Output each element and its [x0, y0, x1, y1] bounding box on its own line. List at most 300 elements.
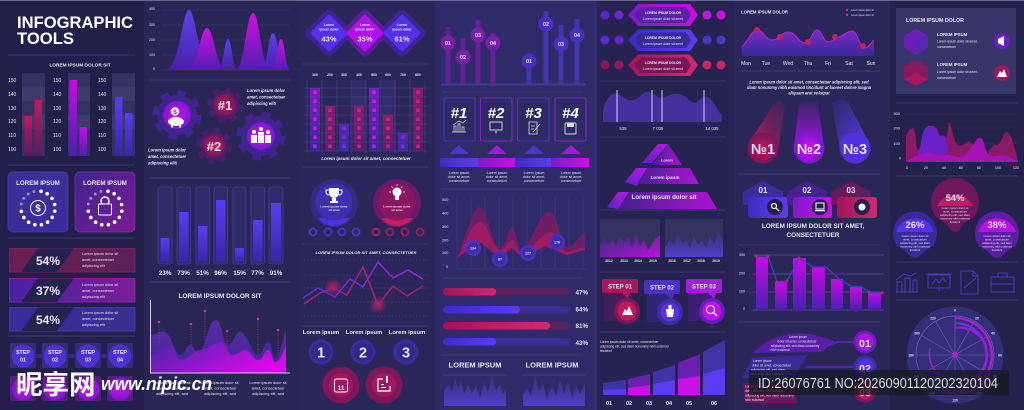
panel: arc list: adipiscing elit, sed diam nonummy: [745, 394, 794, 398]
panel: diamonds: ipsum dolor: [355, 28, 375, 32]
chart: week wave: Fri: [825, 61, 831, 67]
bars: [24, 80, 132, 156]
chart: radial: 120: [952, 398, 958, 402]
axis labels: 120: [8, 119, 17, 125]
chart: radial: 80: [993, 374, 997, 378]
panel: triangle strip: dolor sit amet,: [560, 175, 582, 179]
watermark: site name: 昵享网: [16, 363, 96, 402]
chart: peak area: 100: [149, 53, 155, 57]
chart: rising bars: tincidunt: [600, 349, 612, 353]
panel: arc list: adipiscing elit, sed diam: [751, 368, 785, 372]
chart: vertical progress bars: 96%: [214, 270, 227, 277]
chart: dual year spikes: 2017: [683, 259, 691, 263]
panel: ranked beams: [748, 100, 870, 164]
chart: week wave: Wed: [783, 61, 793, 67]
ribbon row 3: Lorem ipsum dolor sit amet: [643, 67, 683, 71]
chart: lollipops: 03: [475, 33, 481, 39]
chart: mountain bubbles: 134: [470, 246, 476, 250]
panel: step badges: [10, 343, 133, 401]
text block: description: diam nonummy nibh euismod tincidunt ut laoreet dolore magna: [747, 85, 872, 90]
heading: CONSECTETUER: [787, 232, 840, 239]
gear caption 2: adipiscing elit!: [148, 160, 178, 166]
gear caption 1: Lorem ipsum dolor: [247, 88, 285, 93]
row 54% red: [10, 248, 135, 272]
gear: #1: #1: [218, 98, 232, 113]
chart: rising bars: adipiscing elit, sed diam nonummy nibh euismod: [600, 344, 669, 348]
drop 54%: Lorem ipsum dolor sit: [942, 206, 969, 210]
row 54% blue: [10, 308, 135, 331]
panel: diamonds: 35%: [357, 34, 373, 44]
drop 26%: amet, consectetuer: [903, 238, 927, 242]
chart: vertical progress bars: 51%: [196, 270, 209, 277]
icon: landscape: [994, 65, 1010, 81]
panel: triangle strip: Lorem ipsum: [449, 171, 469, 175]
row 54% blue: amet, consectetuer: [82, 317, 115, 321]
beam №1: №1: [751, 142, 775, 158]
legend: [846, 9, 874, 17]
item 01: 01: [859, 338, 871, 350]
heading: LOREM IPSUM DOLOR SIT AMET,: [762, 223, 864, 230]
panel: dollar card: $: [35, 204, 41, 214]
chart: peak area: [149, 7, 291, 71]
panel: step badges: 03: [85, 358, 91, 364]
panel: lorem list with cubes: LOREM IPSUM: [937, 62, 968, 67]
chart: radial: 220: [930, 316, 936, 320]
gear: #2: #2: [207, 139, 221, 154]
card #1: [444, 98, 475, 141]
axis labels: 150: [53, 78, 62, 84]
watermark: site name: www.nipic.cn: [101, 374, 212, 394]
axis labels: 120: [53, 119, 62, 125]
panel: dollar card: LOREM IPSUM: [16, 180, 60, 187]
legend: Lorem ipsum dolor sit: [851, 14, 874, 17]
chart: radial: 0: [954, 308, 956, 312]
panel: two mini spike charts: LOREM IPSUM: [526, 360, 578, 370]
chart notes: adipiscing elit, sed: [204, 391, 236, 396]
item 02: 02: [859, 363, 871, 375]
chart: overlapping areas: [894, 112, 1019, 170]
panel: step badges: STEP: [16, 350, 30, 356]
icon: purple cube: [904, 29, 928, 55]
panel: triangle strip: dolor sit amet,: [486, 175, 508, 179]
chart: grid squares: 100: [312, 73, 318, 77]
chart: radial: 40: [991, 332, 995, 336]
ribbon row 1: LOREM IPSUM DOLOR: [645, 11, 682, 15]
card #4: #4: [562, 105, 579, 122]
drop 26%: adipiscing elit, sed diam: [900, 241, 931, 245]
chart: week wave: Sat: [845, 61, 853, 67]
panel: lock card: [75, 172, 135, 232]
chart: rising bars: 03: [646, 401, 652, 407]
panel: lorem list with cubes: consectetuer: [937, 76, 957, 80]
chart: rising bars: Lorem ipsum dolor sit amet, consectetuer: [600, 340, 659, 344]
chart: horizontal progress: 43%: [576, 340, 589, 347]
panel: lock card: LOREM IPSUM: [83, 180, 127, 187]
panel: triangle strip: dolor sit amet,: [523, 175, 545, 179]
panel: steps with icons: [602, 279, 725, 325]
drop 26%: tincidunt: [910, 248, 920, 252]
chart: overlapping areas: 0: [899, 156, 901, 160]
gear: people: [239, 114, 283, 158]
axis labels: 110: [53, 133, 61, 139]
panel: trophy circle: Lorem ipsum dolor: [320, 204, 348, 208]
panel: triple bar charts: [8, 62, 135, 156]
chart: overlapping areas: 100: [995, 166, 1001, 170]
panel: diamonds: Lorem: [360, 23, 370, 27]
row 37% magenta: Lorem ipsum dolor sit: [82, 283, 119, 287]
panel: triangle strip: Lorem ipsum: [561, 171, 581, 175]
drop 38%: 38%: [987, 220, 1007, 231]
panel: arc list: nonummy nibh euismod: [750, 372, 784, 376]
chart: horizontal progress: 47%: [576, 290, 589, 296]
card #3: [518, 98, 549, 141]
step 02: STEP 02: [650, 286, 675, 292]
legend: Lorem ipsum dolor sit: [851, 9, 874, 12]
chart: peak area: 200: [149, 38, 155, 42]
drop 54%: amet, consectetuer: [943, 210, 967, 214]
ribbon row 2: LOREM IPSUM DOLOR: [645, 36, 682, 40]
panel: numbered list: 2: [359, 346, 367, 362]
chart: week wave: Mon: [741, 61, 751, 67]
chart notes: Lorem ipsum dolor sit: [153, 380, 192, 385]
panel: lorem list with cubes: Lorem ipsum dolor sit amet,: [937, 70, 978, 74]
panel: house icons: [743, 181, 877, 218]
chart: radial: 20: [975, 316, 979, 320]
chart: vertical progress bars: 91%: [270, 270, 283, 277]
chart: grid squares: 600: [385, 73, 391, 77]
row 54% red: Lorem ipsum dolor sit: [82, 252, 119, 256]
panel: dollar card: [8, 172, 68, 232]
row 54% blue: 54%: [36, 313, 60, 327]
axis labels: 100: [8, 147, 17, 153]
chart: wave with markers: [603, 90, 722, 131]
chart: overlapping areas: 120: [1013, 166, 1019, 170]
panel: lorem list with cubes: [896, 8, 1016, 94]
panel: numbered list: [303, 330, 425, 404]
card #4: [555, 98, 586, 141]
icon: red cube: [904, 60, 928, 86]
axis labels: 130: [8, 106, 17, 112]
chart: mountain bubbles: 300: [442, 225, 448, 229]
panel: numbered list: Lorem ipsum: [303, 330, 339, 336]
chart: overlapping areas: 300: [894, 112, 900, 116]
chart: lollipops: 02: [543, 22, 549, 28]
icon: presentation: [926, 274, 952, 291]
chart: grid squares: [304, 73, 428, 161]
panel: two mini spike charts: [443, 360, 586, 406]
axis labels: 100: [98, 147, 107, 153]
text block: description: Lorem ipsum dolor sit amet, consectetuer adipiscing elit, sed: [749, 80, 869, 84]
chart: grid squares: 400: [356, 73, 362, 77]
row 54% red: 54%: [36, 254, 60, 268]
panel: triangle strip: consectetuer: [449, 179, 470, 183]
row 37% magenta: 37%: [36, 284, 60, 298]
chart: week wave: Thu: [804, 61, 813, 67]
panel: lightbulb circle: Lorem ipsum dolor: [383, 204, 411, 208]
title: [17, 14, 133, 48]
chart: vertical progress bars: 73%: [177, 270, 190, 277]
chart: dual year spikes: 2019: [712, 259, 720, 263]
axis labels: [8, 78, 107, 153]
chart: overlapping areas: 60: [959, 166, 963, 170]
chart: radial: 60: [998, 354, 1002, 358]
axis labels: 150: [98, 78, 107, 84]
chart: horizontal progress: 81%: [576, 323, 589, 330]
drop 38%: nonummy nibh euismod: [982, 244, 1012, 248]
chart: lollipops: 03: [558, 42, 564, 48]
panel: triangle strip: [440, 145, 589, 183]
chart: crossing lines: [303, 250, 428, 316]
gear caption 2: Lorem ipsum dolor: [148, 148, 186, 152]
title: TOOLS: [17, 30, 74, 48]
panel: arc list: Lorem ipsum: [789, 335, 808, 339]
panel: lightbulb circle: [373, 179, 421, 227]
drop 26%: [893, 211, 937, 258]
chart: mountain bubbles: 400: [442, 212, 448, 216]
chart: lollipops: 01: [445, 41, 451, 47]
panel: lightbulb circle: sit amet: [391, 208, 403, 212]
gear caption 1: amet, consectetuer: [247, 94, 286, 100]
chart notes: Lorem ipsum dolor sit: [201, 380, 240, 385]
drop 26%: Lorem ipsum dolor sit: [902, 234, 929, 238]
chart: radial: 160: [913, 374, 919, 378]
chart: crossing lines: LOREM IPSUM DOLOR SIT AMET, CONSECTETUER: [316, 250, 417, 255]
ribbon row 2: Lorem ipsum dolor sit amet: [643, 42, 683, 46]
drop 54%: 54%: [945, 193, 965, 204]
ribbon row 2: [600, 30, 726, 51]
chart: rising bars: 04: [666, 401, 673, 407]
gear: piggy bank: $: [173, 109, 177, 116]
icon: document: [961, 271, 978, 294]
chart: rising bars: 06: [711, 401, 717, 407]
panel: step badges: 01: [20, 358, 26, 364]
panel: triangle strip: Lorem ipsum: [524, 171, 544, 175]
chart notes: amet, consectetuer: [251, 386, 285, 390]
axis labels: 130: [98, 106, 107, 112]
chart: radial: 200: [914, 332, 920, 336]
panel: arc list: [742, 330, 876, 403]
chart: peak area: 300: [149, 23, 155, 27]
row 54% red: adipiscing elit: [82, 264, 106, 268]
chart: week wave: [741, 9, 876, 67]
panel: triangle strip: consectetuer: [524, 179, 545, 183]
chart: week wave: LOREM IPSUM DOLOR: [741, 10, 789, 14]
chart: bars with line: [739, 253, 884, 311]
panel: diamonds: Lorem: [397, 23, 407, 27]
beam №2: №2: [797, 142, 821, 158]
chart: dual year spikes: 2012: [605, 259, 613, 263]
icon: briefcase: [991, 273, 1014, 292]
chart: lollipops: 04: [574, 33, 580, 39]
panel: pyramid: Lorem: [661, 158, 673, 162]
chart: lollipops: 01: [526, 59, 532, 65]
panel: diamonds: 43%: [321, 34, 337, 44]
chart: mountain bubbles: 0: [446, 265, 448, 269]
chart: bars with line: 100: [739, 290, 745, 294]
drop 26%: nonummy nibh euismod: [900, 244, 930, 248]
axis labels: 140: [53, 92, 62, 98]
chart: wave with markers: 535: [619, 126, 627, 131]
row 37% magenta: amet, consectetuer: [82, 289, 115, 293]
panel: percentage rows: [10, 248, 135, 331]
card #2: #2: [488, 105, 505, 122]
drop 38%: adipiscing elit, sed diam: [982, 241, 1013, 245]
chart: peak area: 400: [149, 7, 155, 11]
panel: arc list: nibh euismod: [745, 398, 764, 402]
row 37% magenta: [10, 278, 135, 302]
text block: description: aliquam erat volutpat: [788, 90, 830, 96]
panel: diamonds: ipsum dolor: [392, 28, 412, 32]
panel: pyramid: Lorem Ipsum dolor sit: [632, 194, 696, 201]
panel: outline icons: [896, 271, 1014, 294]
axis labels: 140: [98, 92, 107, 98]
panel: numbered list: Lorem ipsum: [389, 330, 425, 336]
watermark: id bar: ID:26076761 NO:20260901120202320104: [758, 376, 998, 392]
watermark: site name: [16, 363, 212, 402]
panel: diamonds: ipsum dolor: [319, 28, 339, 32]
step 01: STEP 01: [608, 284, 633, 290]
panel: triangle strip: dolor sit amet,: [448, 175, 470, 179]
chart: radial: [906, 306, 1004, 404]
chart backgrounds: [22, 73, 135, 156]
chart: week wave: Tue: [762, 61, 770, 67]
chart: vertical progress bars: 15%: [233, 270, 246, 277]
panel: diamonds: [304, 8, 427, 58]
chart: overlapping areas: 0: [906, 166, 908, 170]
chart: horizontal progress: 64%: [576, 306, 589, 314]
panel: step badges: 02: [52, 358, 58, 364]
panel: percentage drops: [893, 178, 1019, 258]
chart: vertical progress bars: 23%: [159, 270, 172, 277]
drop 26%: 26%: [905, 220, 925, 231]
chart: overlapping areas: 200: [894, 126, 900, 130]
panel: numbered list: Lorem ipsum: [346, 330, 382, 336]
chart: week wave: Sun: [867, 61, 876, 67]
chart: grid squares: 500: [371, 73, 377, 77]
panel: trophy circle: sit amet: [328, 208, 340, 212]
chart notes: Lorem ipsum dolor sit: [249, 380, 288, 385]
axis labels: 100: [53, 147, 62, 153]
card #1: #1: [451, 105, 467, 122]
row 37% magenta: adipiscing elit: [82, 295, 106, 299]
chart: wave with markers: 14 035: [705, 126, 719, 131]
icon: note: [366, 366, 402, 404]
panel: diamonds: Lorem: [324, 23, 334, 27]
row 54% red: amet, consectetuer: [82, 258, 115, 262]
chart: radial: 140: [929, 392, 935, 396]
ribbon row 1: [600, 4, 726, 26]
panel: pyramid: Lorem ipsum: [651, 175, 679, 180]
drop 54%: nonummy nibh euismod: [940, 216, 970, 220]
panel: numbered list: 1: [317, 346, 325, 362]
panel: step badges: STEP: [48, 350, 62, 356]
chart: dual year spikes: 2018: [697, 259, 705, 263]
chart: rising bars: 01: [606, 401, 612, 407]
panel: arc list: adipiscing elit, sed diam nonummy: [771, 344, 820, 348]
chart: layered area with pins: [150, 293, 290, 396]
chart: mountain bubbles: 200: [442, 238, 448, 242]
chart: rising bars: [600, 340, 725, 407]
house 03: 03: [847, 186, 856, 195]
chart: dual year spikes: 2013: [620, 259, 628, 263]
ribbon row 3: LOREM IPSUM DOLOR: [645, 61, 682, 65]
chart: radial: 180: [908, 354, 914, 358]
axis labels: 130: [53, 106, 62, 112]
chart: mountain bubbles: 176: [554, 240, 560, 244]
panel: numbered list: 3: [402, 346, 410, 362]
chart: wave with markers: 7 035: [653, 126, 664, 131]
watermark: id bar: [749, 370, 1009, 395]
drop 54%: adipiscing elit, sed diam: [940, 213, 971, 217]
card #2: [480, 98, 512, 141]
panel: arc list: nibh euismod: [771, 348, 790, 352]
icon: megaphone: [994, 33, 1010, 49]
axis labels: 110: [98, 133, 106, 139]
drop 38%: tincidunt: [992, 248, 1002, 252]
panel: hash cards: [444, 98, 586, 141]
card #3: #3: [525, 105, 542, 122]
panel: pyramid: [607, 144, 717, 209]
chart: dual year spikes: 2016: [668, 259, 676, 263]
panel: arc list: dolor sit amet, consectetuer: [777, 340, 818, 344]
chart: grid squares: 200: [327, 73, 333, 77]
icon: growth chart: [896, 273, 918, 292]
chart notes: amet, consectetuer: [203, 386, 237, 390]
drop 54%: [931, 178, 979, 232]
chart notes: amet, consectetuer: [155, 386, 189, 390]
panel: step badges: STEP: [113, 350, 127, 356]
panel: lorem list with cubes: consectetuer: [937, 45, 957, 49]
panel: arc list: dolor sit amet, consectetuer: [745, 389, 785, 393]
chart notes: [153, 380, 288, 396]
heading: LOREM IPSUM DOLOR SIT: [178, 293, 262, 300]
chart: dual year spikes: 2014: [634, 259, 642, 263]
chart: mountain bubbles: 127: [525, 252, 531, 256]
chart: lollipops: 02: [460, 55, 466, 61]
chart: grid squares: Lorem ipsum dolor sit amet, consectetuer: [321, 156, 411, 161]
panel: lorem list with cubes: Lorem ipsum dolor sit amet,: [937, 40, 978, 44]
panel: arc list: Lorem ipsum: [753, 359, 772, 363]
chart: grid squares: 800: [415, 73, 421, 77]
row 54% blue: Lorem ipsum dolor sit: [82, 311, 119, 315]
chart: mountain bubbles: 87: [498, 258, 502, 262]
panel: step badges: STEP: [81, 350, 95, 356]
panel: gears: [148, 88, 286, 166]
panel: triangle strip: consectetuer: [561, 179, 582, 183]
panel: step badges: 04: [117, 358, 123, 364]
ribbon row 3: [600, 54, 726, 76]
chart notes: adipiscing elit, sed: [156, 391, 188, 396]
chart: bars with line: 300: [739, 253, 745, 257]
panel: diamonds: 61%: [394, 34, 410, 44]
chart: overlapping areas: 20: [924, 166, 928, 170]
chart: lollipops: 04: [490, 41, 496, 47]
chart: horizontal progress: [443, 288, 589, 347]
house 02: 02: [803, 186, 812, 195]
chart: radial: 100: [976, 392, 982, 396]
chart: mountain bubbles: 100: [442, 251, 448, 255]
panel: lorem list with cubes: LOREM IPSUM: [937, 32, 968, 37]
gear caption 1: adipiscing elit!: [247, 101, 277, 106]
chart: bars with line: 200: [739, 272, 745, 276]
chart notes: adipiscing elit, sed: [252, 391, 284, 396]
panel: two mini spike charts: LOREM IPSUM: [449, 360, 501, 370]
drop 38%: [975, 211, 1019, 258]
chart: overlapping areas: 100: [894, 142, 900, 146]
panel: trophy circle: [310, 179, 358, 227]
chart: rising bars: 02: [626, 401, 632, 407]
drop 38%: amet, consectetuer: [985, 238, 1009, 242]
